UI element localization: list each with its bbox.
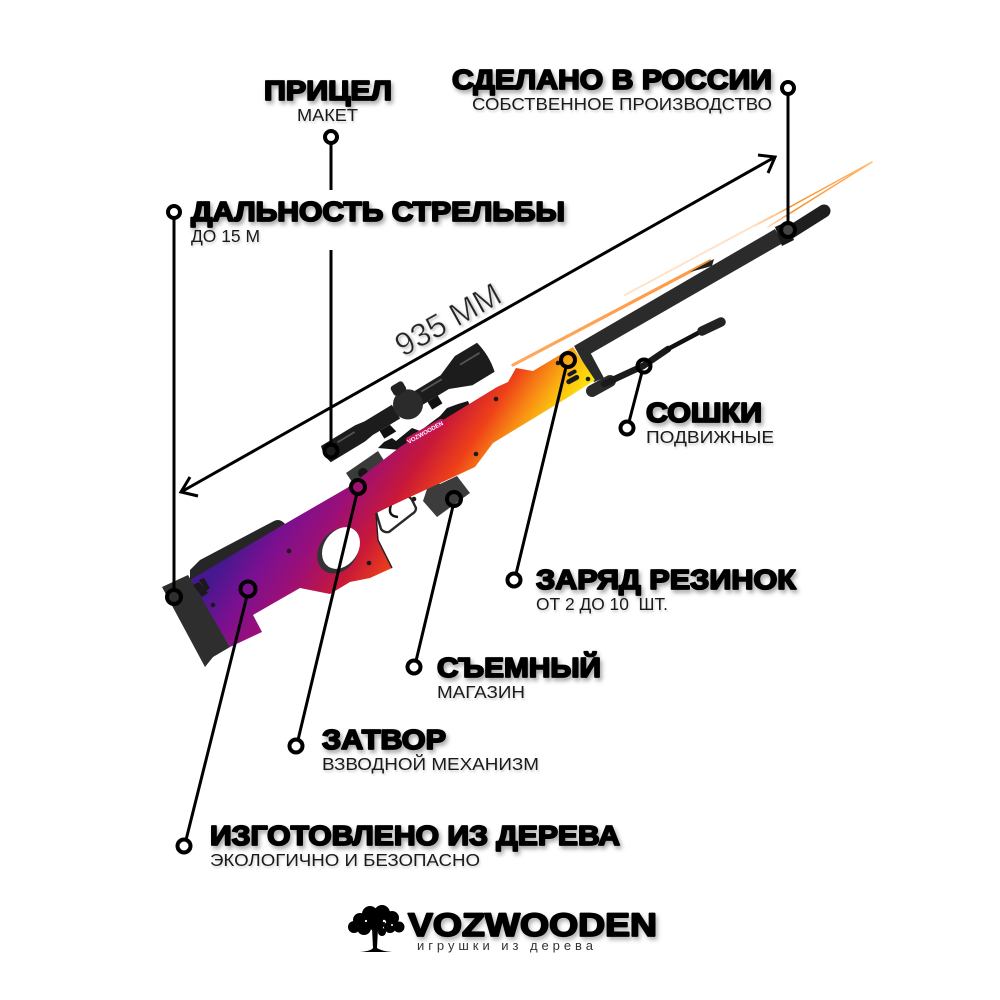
callout: made in Russia: СДЕЛАНО В РОССИИ (452, 64, 772, 95)
rifle (162, 162, 872, 667)
callout: magazine: СЪЕМНЫЙ (437, 652, 601, 683)
bolt plate (346, 451, 390, 494)
callout: range (167, 196, 565, 604)
thumbhole (309, 520, 368, 582)
magazine (423, 476, 470, 517)
stock and body gradient (190, 347, 595, 647)
scope rail (378, 401, 470, 450)
callout: range: ДАЛЬНОСТЬ СТРЕЛЬБЫ (191, 196, 565, 227)
grip edge (376, 513, 392, 568)
trigger (390, 505, 398, 517)
callout: bolt (290, 480, 539, 774)
callout: scope: ПРИЦЕЛ (264, 75, 392, 106)
logo (348, 905, 657, 953)
callout: bipod: ПОДВИЖНЫЕ (646, 427, 774, 447)
logo badge: VOZWOODEN (407, 421, 445, 446)
callout: range: ДО 15 М (191, 226, 260, 246)
tracer beam (513, 162, 872, 365)
callout: magazine (408, 492, 601, 702)
logo: игрушки из дерева (417, 938, 594, 953)
callout: bolt: ВЗВОДНОЙ МЕХАНИЗМ (322, 753, 539, 774)
callout: charge (508, 353, 796, 614)
callout: magazine: МАГАЗИН (437, 682, 525, 702)
callout: scope (264, 75, 392, 458)
butt plate (162, 575, 230, 667)
trigger guard (376, 496, 416, 532)
dimension label: 935 MM (389, 276, 507, 364)
callout: charge: ОТ 2 ДО 10 ШТ. (536, 594, 668, 614)
callout: wood: ЭКОЛОГИЧНО И БЕЗОПАСНО (210, 850, 480, 870)
dimension arrow (181, 155, 775, 496)
callout: made in Russia (452, 64, 795, 237)
callout: scope: МАКЕТ (297, 105, 358, 125)
stock details (193, 361, 590, 607)
bipod (592, 322, 721, 391)
callout: wood (178, 582, 620, 870)
scope (312, 336, 496, 469)
callout: wood: ИЗГОТОВЛЕНО ИЗ ДЕРЕВА (210, 820, 620, 851)
callout: made in Russia: СОБСТВЕННОЕ ПРОИЗВОДСТВО (472, 94, 772, 114)
stock cheek rest (190, 520, 285, 582)
icon: tree (348, 905, 404, 952)
barrel (574, 211, 824, 382)
callout: bipod (620, 360, 774, 447)
logo: VOZWOODEN (408, 907, 657, 943)
callout: bolt: ЗАТВОР (322, 724, 446, 755)
callout: bipod: СОШКИ (646, 397, 762, 428)
callout: charge: ЗАРЯД РЕЗИНОК (536, 564, 796, 595)
